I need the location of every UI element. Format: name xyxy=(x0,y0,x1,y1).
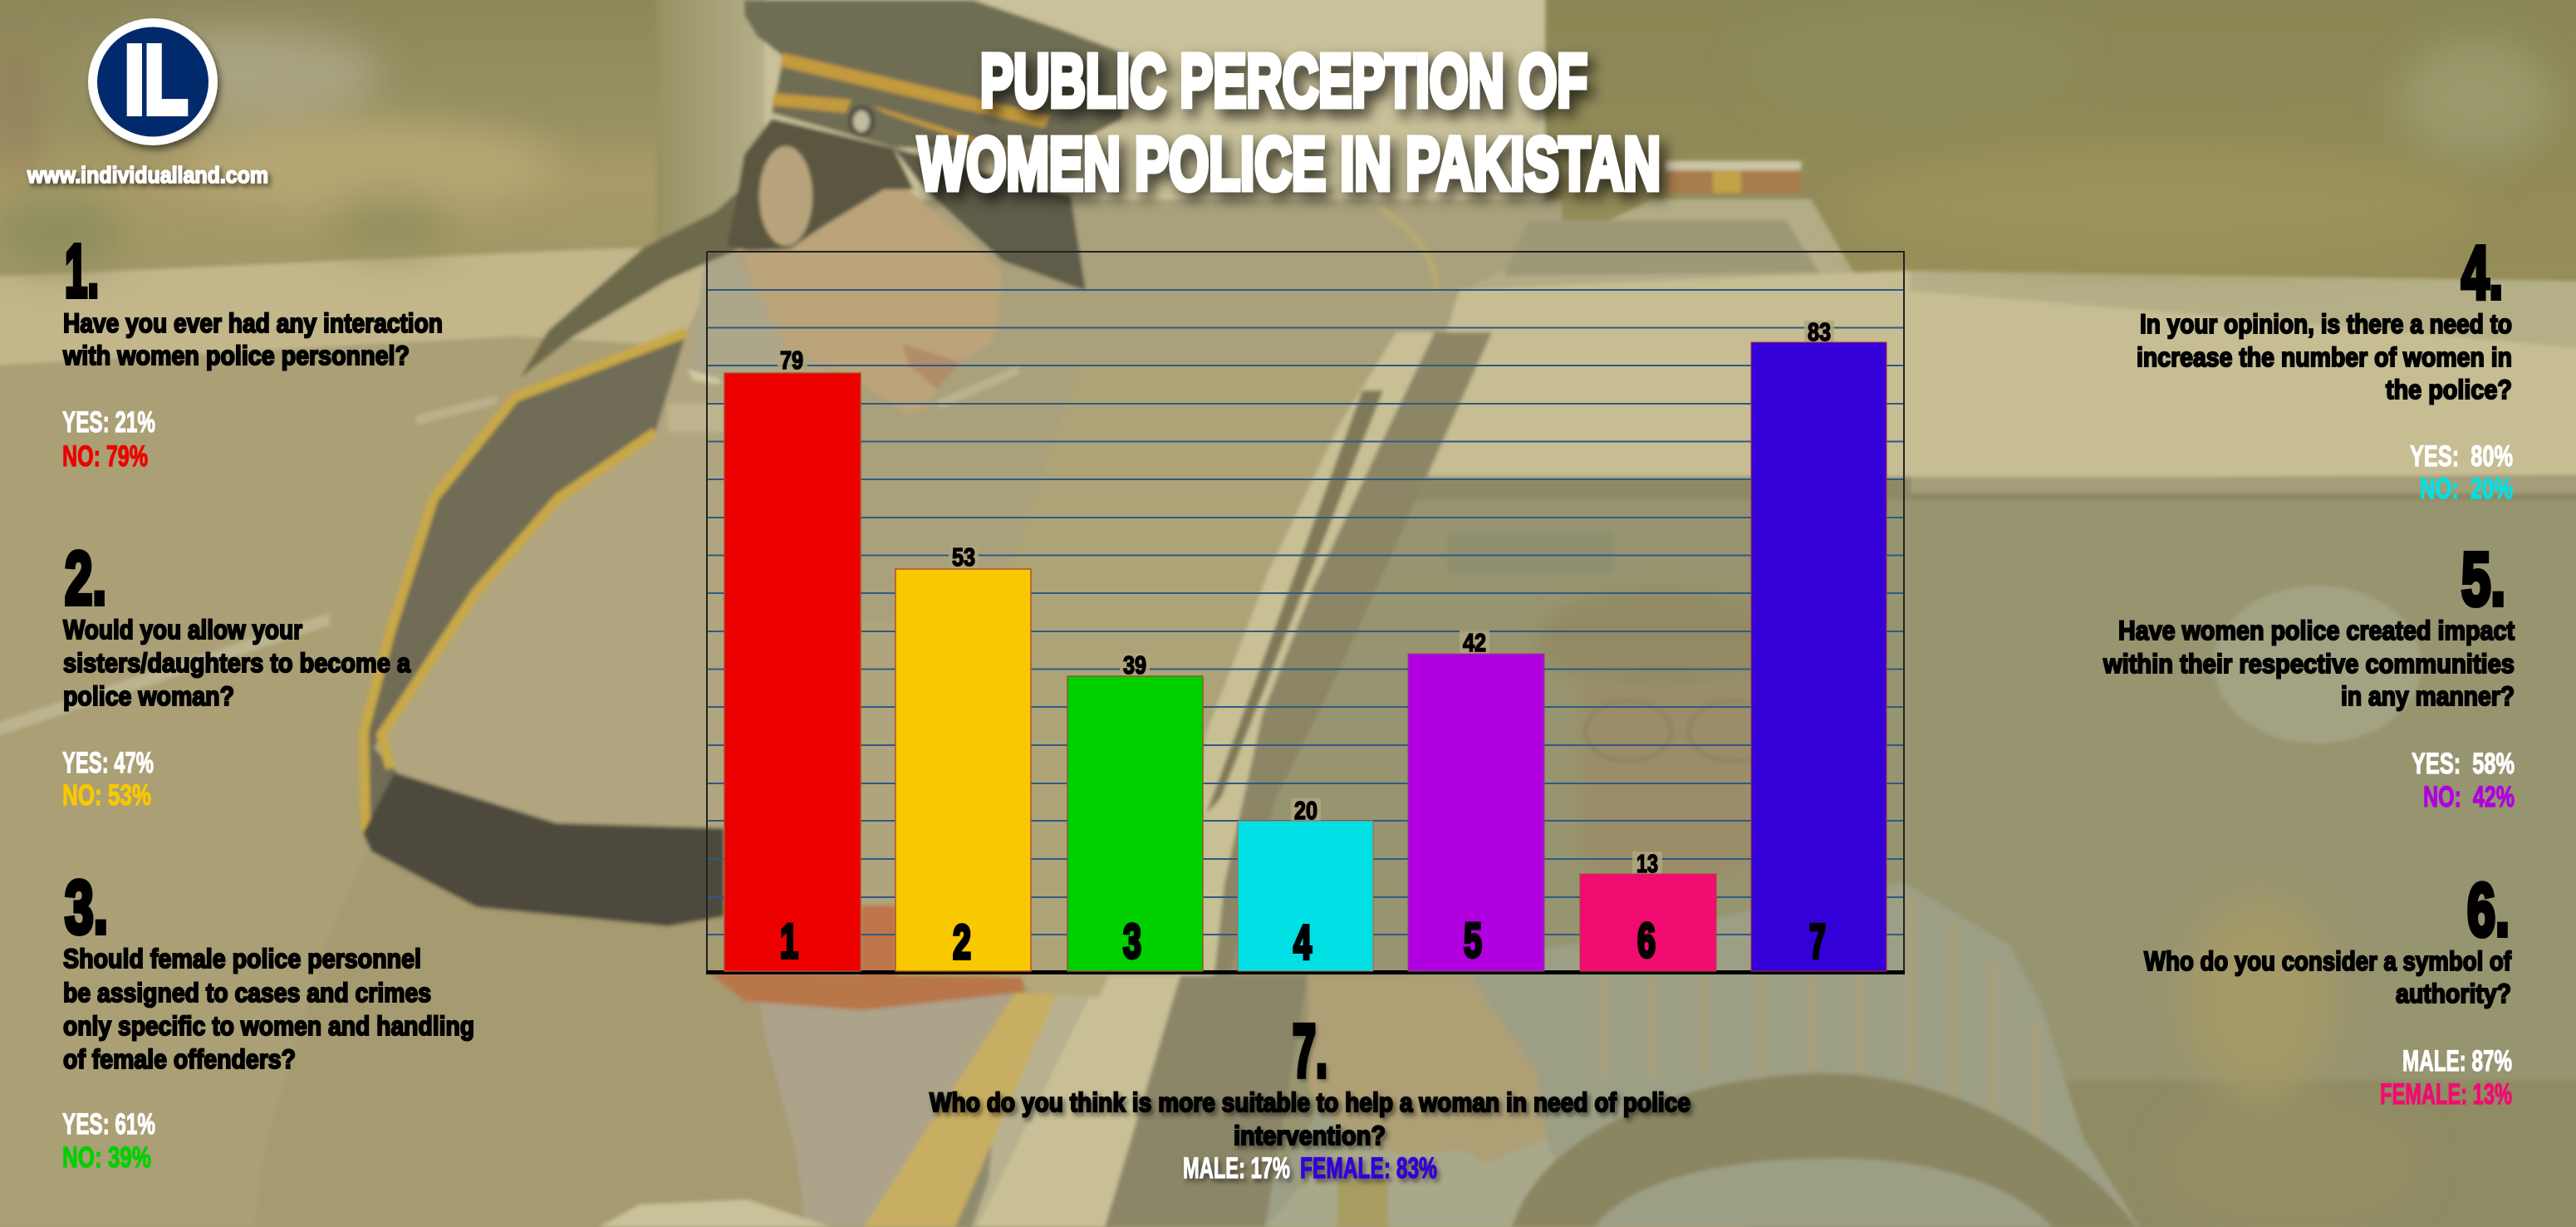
bar chart xyxy=(706,252,1905,974)
woman: cap crown xyxy=(744,0,1133,148)
bar 7: 7 xyxy=(1809,915,1826,969)
answers 7: FEMALE: 83% xyxy=(1300,1152,1437,1185)
answers 4: YES: 80% xyxy=(2410,440,2513,473)
woman: shirt xyxy=(363,246,864,914)
door frame xyxy=(930,975,1308,1227)
bar 4: 4 xyxy=(1293,915,1312,969)
driver head xyxy=(1537,590,1786,893)
woman: cap bands xyxy=(772,53,1050,155)
website url: www.individualland.com xyxy=(27,162,268,188)
title: WOMEN POLICE IN PAKISTAN xyxy=(918,123,1661,206)
bar 7 xyxy=(1751,317,1887,971)
bar 4: 20 xyxy=(1294,796,1317,825)
woman: ear xyxy=(759,146,812,246)
answers 5: NO: 42% xyxy=(2423,781,2515,813)
bar 6: 13 xyxy=(1636,849,1658,878)
woman: collar xyxy=(689,246,822,390)
answers 7: MALE: 17% xyxy=(1183,1152,1290,1185)
panel: question 2 xyxy=(62,537,410,812)
question 6 text: authority? xyxy=(2396,979,2511,1009)
question 3 text: be assigned to cases and crimes xyxy=(63,978,431,1008)
bar 7: 83 xyxy=(1808,317,1831,346)
answers 2: YES: 47% xyxy=(62,747,154,779)
clipboard xyxy=(709,906,1026,1010)
question 2 text: sisters/daughters to become a xyxy=(63,648,410,678)
answers 6: MALE: 87% xyxy=(2402,1045,2512,1077)
woman: shoulder emblem xyxy=(668,369,724,432)
question 3 text: of female offenders? xyxy=(63,1044,296,1074)
panel: question 3 xyxy=(62,866,474,1174)
woman: face xyxy=(739,189,1003,415)
question 2 text: police woman? xyxy=(63,681,234,711)
question 3 text: Should female police personnel xyxy=(63,944,421,974)
question 4 text: the police? xyxy=(2386,375,2512,405)
question 1 text: Have you ever had any interaction xyxy=(63,308,443,338)
bar 1 xyxy=(724,346,861,971)
woman: uniform trousers xyxy=(254,856,806,1227)
panel: question 5 xyxy=(2103,538,2515,813)
bar 2 xyxy=(895,542,1031,971)
number 5: 5. xyxy=(2461,538,2505,621)
answers 4 xyxy=(2410,440,2513,505)
road marking xyxy=(864,993,1057,1227)
answers 4: NO: 20% xyxy=(2420,473,2513,505)
paper and lap xyxy=(1265,1138,1578,1227)
question 5 text xyxy=(2103,616,2515,711)
driver shirt xyxy=(1246,882,2139,1227)
question 7 text: Who do you think is more suitable to help a woman in need of police xyxy=(930,1087,1690,1117)
driver hand xyxy=(1308,975,1547,1163)
question 4 text xyxy=(2137,309,2512,405)
bar 3: 3 xyxy=(1123,915,1141,969)
answers 6: FEMALE: 13% xyxy=(2380,1078,2512,1111)
bar 5: 5 xyxy=(1464,914,1482,968)
bar 2: 2 xyxy=(953,915,971,969)
woman: ponytail xyxy=(520,183,748,378)
bar 1: 1 xyxy=(780,915,798,969)
bar 3 xyxy=(1067,650,1203,971)
woman: lips xyxy=(902,344,961,389)
panel: question 6 xyxy=(2144,869,2512,1111)
number 4: 4. xyxy=(2461,232,2503,315)
question 1 text: with women police personnel? xyxy=(62,341,410,371)
bar 5: 42 xyxy=(1463,628,1486,657)
panel: question 4 xyxy=(2137,232,2513,505)
car pillar xyxy=(1174,332,1492,997)
title: PUBLIC PERCEPTION OF xyxy=(980,40,1587,123)
answers 5: YES: 58% xyxy=(2412,748,2515,780)
steering wheel xyxy=(1512,1073,2137,1227)
question 5 text: in any manner? xyxy=(2341,681,2515,711)
panel: question 1 xyxy=(62,230,443,473)
woman: cap badge xyxy=(851,108,872,135)
bar 6: 6 xyxy=(1637,914,1656,968)
question 4 text: In your opinion, is there a need to xyxy=(2140,309,2512,339)
question 7 text: intervention? xyxy=(1234,1121,1386,1151)
question 4 text: increase the number of women in xyxy=(2137,342,2512,372)
panel: question 7 xyxy=(930,1010,1690,1185)
answers 1: NO: 79% xyxy=(62,440,148,473)
number 3: 3. xyxy=(65,866,108,950)
title xyxy=(918,40,1661,206)
woman: belt xyxy=(363,773,724,926)
woman: cap peak xyxy=(893,148,1086,291)
woman: hair xyxy=(727,119,914,251)
answers 1: YES: 21% xyxy=(62,406,155,439)
number 7: 7. xyxy=(1293,1010,1327,1093)
bar 1: 79 xyxy=(780,346,803,375)
bar 6 xyxy=(1580,849,1716,971)
answers 2 xyxy=(62,747,154,812)
answers 1 xyxy=(62,406,155,473)
bar 3: 39 xyxy=(1123,650,1146,680)
logo xyxy=(88,18,218,145)
question 6 text xyxy=(2144,946,2511,1009)
number 2: 2. xyxy=(65,537,106,621)
question 2 text: Would you allow your xyxy=(63,615,302,645)
question 7 text xyxy=(930,1087,1690,1151)
bar 4 xyxy=(1238,796,1373,971)
answers 2: NO: 53% xyxy=(62,779,151,812)
logo: IL xyxy=(125,26,188,134)
answers 3: NO: 39% xyxy=(62,1141,151,1174)
question 3 text xyxy=(63,944,474,1074)
question 3 text: only specific to women and handling xyxy=(63,1011,474,1041)
answers 3: YES: 61% xyxy=(62,1108,155,1141)
answers 6 xyxy=(2380,1045,2512,1111)
bar 5 xyxy=(1408,628,1544,971)
question 1 text xyxy=(62,308,443,371)
woman: flap piping xyxy=(364,332,687,831)
question 2 text xyxy=(63,615,410,711)
answers 5 xyxy=(2412,748,2515,813)
bar 2: 53 xyxy=(952,542,975,572)
question 6 text: Who do you consider a symbol of xyxy=(2144,946,2511,976)
number 6: 6. xyxy=(2467,869,2510,952)
question 5 text: Have women police created impact xyxy=(2118,616,2515,645)
chart frame and gridlines xyxy=(706,252,1905,974)
number 1: 1. xyxy=(65,230,99,313)
answers 7 xyxy=(1183,1152,1437,1185)
question 5 text: within their respective communities xyxy=(2103,649,2515,679)
woman: shoulder flap xyxy=(364,331,687,831)
answers 3 xyxy=(62,1108,155,1174)
